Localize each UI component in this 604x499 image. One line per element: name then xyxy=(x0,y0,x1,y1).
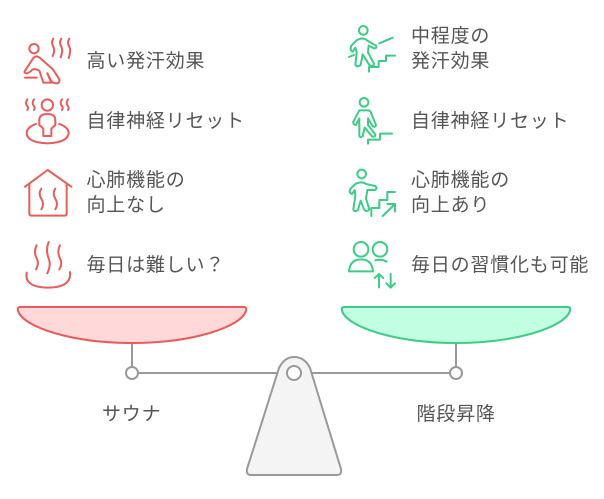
text: moderate sweating effect: 発汗効果 xyxy=(411,50,490,72)
text: cardiopulmonary improvement: 心肺機能の xyxy=(411,169,510,191)
right pan: stair climbing xyxy=(342,307,570,343)
icon: house with steam xyxy=(25,170,71,216)
icon: person in bath with steam xyxy=(26,99,69,143)
beam of the scale xyxy=(138,372,450,374)
text: cardiopulmonary improvement: 向上あり xyxy=(411,194,490,216)
right pivot xyxy=(450,367,462,379)
text: moderate sweating effect: 中程度の xyxy=(411,25,490,47)
icon: person climbing stairs with up arrow xyxy=(350,170,395,216)
text: moderate sweating effect xyxy=(411,25,490,72)
text: hard to do daily: 毎日は難しい？ xyxy=(86,254,225,276)
text: high sweating effect: 高い発汗効果 xyxy=(86,50,205,72)
text: autonomic nerve reset, right: 自律神経リセット xyxy=(411,110,569,132)
text: cardiopulmonary improvement xyxy=(411,169,510,216)
text: can become daily habit: 毎日の習慣化も可能 xyxy=(411,254,589,276)
text: autonomic nerve reset, left: 自律神経リセット xyxy=(86,110,245,132)
icon: person sitting in sauna with steam xyxy=(25,39,70,83)
label: stair climbing: 階段昇降 xyxy=(416,403,496,425)
icon: two people with up and down arrows xyxy=(349,242,395,288)
label: sauna: サウナ xyxy=(102,404,161,425)
fulcrum pin xyxy=(287,366,301,380)
text: no cardiopulmonary improvement: 向上なし xyxy=(86,194,166,216)
icon: person walking down steps xyxy=(353,98,392,144)
text: no cardiopulmonary improvement xyxy=(86,169,186,216)
right pan stem xyxy=(455,343,457,367)
text: no cardiopulmonary improvement: 心肺機能の xyxy=(86,169,186,191)
left pivot xyxy=(126,367,138,379)
left pan: sauna xyxy=(18,307,246,343)
icon: hot spring steam xyxy=(26,242,70,288)
left pan stem xyxy=(131,343,133,367)
scale fulcrum xyxy=(247,357,341,475)
icon: person climbing stairs, moderate xyxy=(349,26,395,72)
